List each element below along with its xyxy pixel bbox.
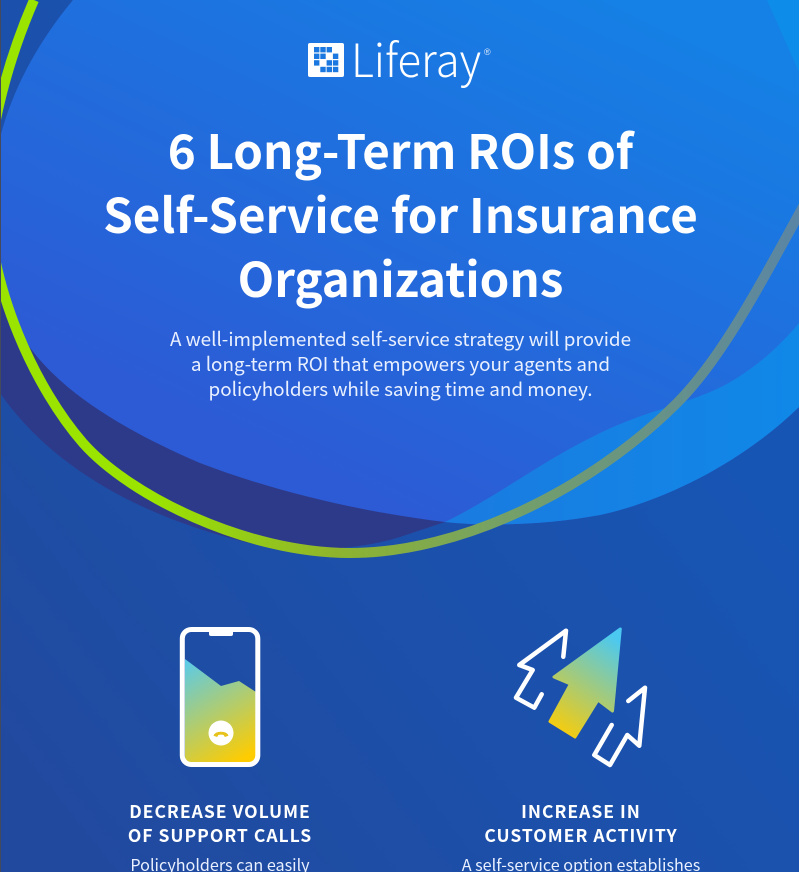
title: 6 Long-Term ROIs of xyxy=(168,114,633,182)
intro text: A well-implemented self-service strategy will provide xyxy=(170,325,631,352)
title xyxy=(103,114,698,310)
logo xyxy=(308,25,491,91)
intro text xyxy=(170,325,631,402)
intro text: a long-term ROI that empowers your agents and xyxy=(191,350,610,377)
registered mark: ® xyxy=(484,47,491,57)
heading: decrease volume of support calls: DECREASE VOLUME xyxy=(129,799,311,824)
title: Self-Service for Insurance xyxy=(103,178,698,246)
title: Organizations xyxy=(238,242,563,310)
icon: rising arrows xyxy=(516,629,645,765)
heading: decrease volume of support calls: OF SUPPORT CALLS xyxy=(128,823,312,848)
icon: phone xyxy=(182,630,258,764)
intro text: policyholders while saving time and money. xyxy=(209,375,592,402)
heading: decrease volume of support calls xyxy=(128,799,312,848)
main blue shape xyxy=(0,0,799,524)
heading: increase in customer activity: INCREASE IN xyxy=(521,799,641,824)
logo mark xyxy=(308,43,344,77)
top-right corner highlight xyxy=(767,0,799,72)
heading: increase in customer activity: CUSTOMER ACTIVITY xyxy=(484,823,678,848)
heading: increase in customer activity xyxy=(484,799,678,848)
logo wordmark: Liferay xyxy=(351,25,481,91)
green ring xyxy=(0,0,799,553)
left edge strip xyxy=(0,0,1,872)
dark purple swoosh xyxy=(0,280,445,549)
light blue wave xyxy=(445,323,799,524)
